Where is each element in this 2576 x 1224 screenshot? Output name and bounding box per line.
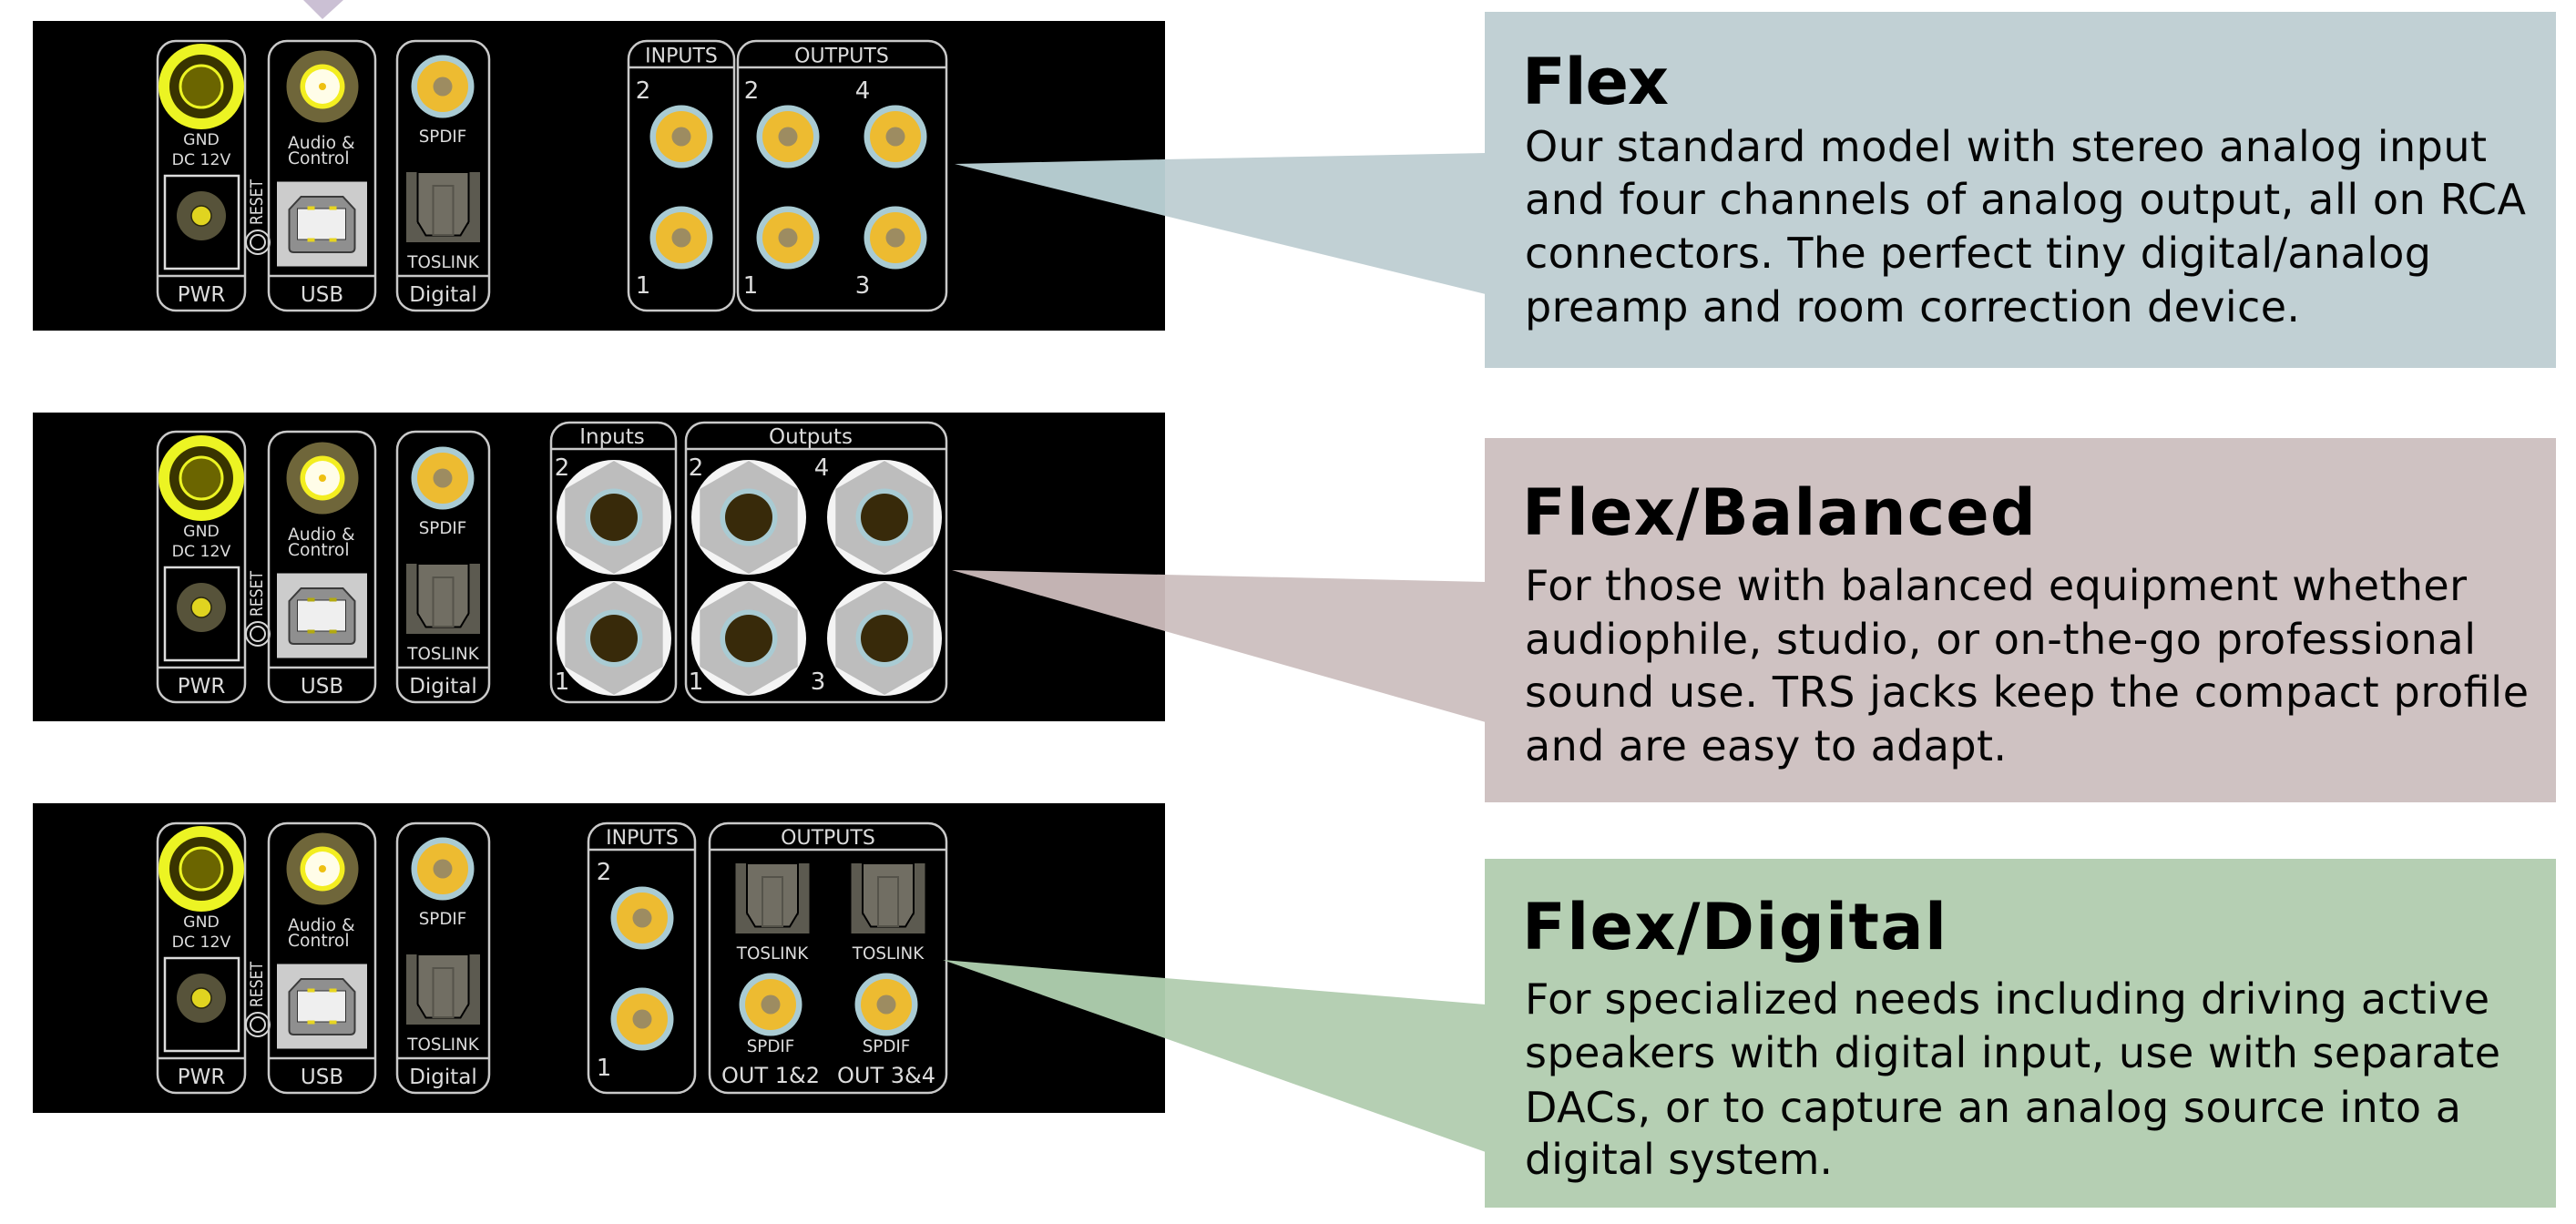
text block: Flex/Balanced description: and are easy to adapt. (1525, 721, 2007, 770)
PWR group: DC 12V (172, 933, 231, 952)
outputs group: Outputs (769, 425, 853, 449)
USB group: USB (301, 283, 343, 307)
USB group: USB (301, 675, 343, 699)
USB group (269, 823, 375, 1093)
Digital group (397, 41, 489, 311)
text block: Flex/Balanced description: audiophile, studio, or on-the-go professional (1525, 615, 2476, 664)
text block: Flex description: and four channels of analog output, all on RCA (1525, 175, 2527, 224)
inputs group: 2 (636, 77, 650, 105)
USB group: Audio & (288, 134, 355, 153)
PWR group (158, 823, 245, 1093)
callout: Flex/Digital (1485, 859, 2556, 1208)
Digital group: Digital (409, 283, 477, 307)
outputs group (710, 823, 946, 1093)
USB group: USB (301, 1066, 343, 1089)
callout pointer: Flex/Digital (943, 960, 1486, 1152)
outputs group: 3 (855, 272, 870, 300)
outputs group: TOSLINK (852, 944, 925, 964)
Digital group: TOSLINK (406, 1035, 480, 1055)
Digital group: TOSLINK (406, 645, 480, 664)
outputs group: 4 (855, 77, 870, 105)
inputs group: 1 (555, 668, 569, 696)
outputs group: OUT 3&4 (837, 1063, 935, 1088)
PWR group: PWR (178, 675, 225, 699)
text block: Flex/Balanced description: For those with balanced equipment whether (1525, 561, 2467, 610)
outputs group: OUT 1&2 (721, 1063, 820, 1088)
outputs group: 1 (743, 272, 758, 300)
text block: Flex/Digital description (1525, 974, 2500, 1184)
USB group: Audio & (288, 916, 355, 935)
text block: Flex/Digital description: speakers with digital input, use with separate (1525, 1028, 2500, 1077)
Digital group: TOSLINK (406, 253, 480, 272)
text block: Flex/Digital description: For specialized needs including driving active (1525, 974, 2489, 1024)
inputs group (588, 823, 695, 1093)
Digital group: Digital (409, 675, 477, 699)
PWR group: PWR (178, 1066, 225, 1089)
inputs group: Inputs (579, 425, 645, 449)
inputs group: 1 (636, 272, 650, 300)
outputs group (738, 41, 946, 311)
reset button (246, 179, 270, 254)
heading: Flex/Balanced: Flex/Balanced (1522, 475, 2036, 550)
reset button: RESET (247, 571, 267, 617)
USB group: Control (288, 149, 350, 168)
outputs group (686, 423, 946, 702)
inputs group: 2 (555, 454, 569, 482)
Digital group (397, 432, 489, 702)
inputs group (629, 41, 734, 311)
text block: Flex description: Our standard model with stereo analog input (1525, 122, 2487, 171)
outputs group: 2 (744, 77, 759, 105)
reset button: RESET (247, 179, 267, 225)
PWR group: GND (183, 131, 220, 149)
inputs group: 2 (597, 859, 611, 886)
USB group: Audio & (288, 525, 355, 545)
outputs group: TOSLINK (736, 944, 809, 964)
outputs group: OUTPUTS (794, 46, 889, 67)
reset button: RESET (247, 962, 267, 1007)
PWR group (158, 41, 245, 311)
pointer triangle above first panel (303, 0, 343, 19)
text block: Flex/Digital description: DACs, or to capture an analog source into a (1525, 1083, 2461, 1132)
callout: Flex/Balanced (1485, 438, 2556, 802)
outputs group: 4 (814, 454, 829, 482)
USB group (269, 41, 375, 311)
Digital group: Digital (409, 1066, 477, 1089)
USB group (269, 432, 375, 702)
text block: Flex description: connectors. The perfect tiny digital/analog (1525, 229, 2431, 278)
text block: Flex/Digital description: digital system. (1525, 1135, 1833, 1184)
outputs group: 1 (689, 668, 703, 696)
USB group: Control (288, 541, 350, 560)
Digital group (397, 823, 489, 1093)
outputs group: 3 (811, 668, 825, 696)
Digital group: SPDIF (419, 910, 466, 929)
PWR group: PWR (178, 283, 225, 307)
panel: Flex/Digital rear view (33, 803, 1165, 1113)
text block: Flex/Balanced description: sound use. TRS jacks keep the compact profile (1525, 668, 2529, 717)
Digital group: SPDIF (419, 128, 466, 147)
inputs group: INPUTS (645, 46, 718, 67)
inputs group: INPUTS (606, 827, 679, 850)
reset button (246, 962, 270, 1036)
text block: Flex description: preamp and room correction device. (1525, 282, 2300, 332)
PWR group: DC 12V (172, 543, 231, 561)
Digital group: SPDIF (419, 519, 466, 538)
PWR group (158, 432, 245, 702)
inputs group: 1 (597, 1055, 611, 1082)
text block: Flex/Balanced description (1525, 561, 2529, 770)
callout pointer: Flex/Balanced (952, 570, 1486, 722)
outputs group: SPDIF (863, 1037, 910, 1056)
inputs group (551, 423, 676, 702)
USB group: Control (288, 932, 350, 951)
panel: Flex rear view (33, 21, 1165, 331)
PWR group: GND (183, 523, 220, 541)
panel: Flex/Balanced rear view (33, 413, 1165, 721)
outputs group: 2 (689, 454, 703, 482)
PWR group: GND (183, 913, 220, 932)
PWR group: DC 12V (172, 151, 231, 169)
callout: Flex (1485, 12, 2556, 368)
reset button (246, 571, 270, 646)
heading: Flex/Digital: Flex/Digital (1522, 890, 1947, 964)
outputs group: OUTPUTS (781, 827, 875, 850)
outputs group: SPDIF (747, 1037, 794, 1056)
heading: Flex: Flex (1522, 45, 1669, 119)
callout pointer: Flex (955, 153, 1486, 294)
text block: Flex description (1525, 122, 2527, 332)
